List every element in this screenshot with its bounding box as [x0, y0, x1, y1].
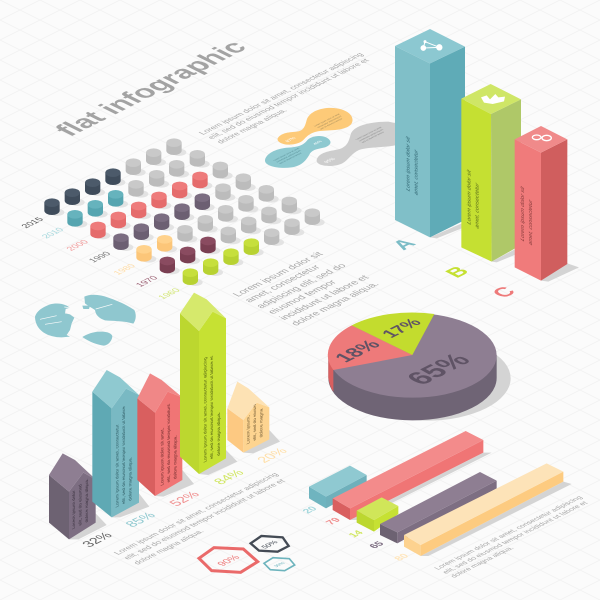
column 20% yellow: Lorem ipsum, — [246, 415, 250, 445]
year labels — [19, 216, 182, 300]
text block: lower right paragraph: dolore magna aliqua. — [448, 545, 516, 579]
bubble: teal: sed do eiusmod tempor — [279, 152, 303, 164]
red side sliver — [328, 355, 333, 392]
bubble: teal — [265, 136, 330, 168]
red wedge — [328, 325, 412, 370]
hexagon 50%: 50% — [259, 539, 280, 550]
panel: speech bubbles — [265, 108, 397, 168]
column 84% green: Lorem ipsum dolor sit amet, consectetur adipiscing — [203, 356, 208, 463]
column B green: Lorem ipsum dolor sit — [467, 169, 472, 226]
bar 79 red — [333, 431, 492, 520]
percent labels: 20% — [253, 446, 291, 465]
pie side — [328, 355, 497, 420]
bar 14 green — [357, 497, 398, 532]
pie top — [328, 313, 497, 398]
percent labels: 52% — [166, 489, 203, 508]
text block: top paragraph: dolore magna aliqua. — [215, 107, 289, 145]
year labels: 1980 — [111, 263, 138, 276]
column 85% teal: elit, sed do eiusmod tempor incididunt ut labore — [121, 405, 126, 505]
year labels: 1990 — [86, 250, 113, 264]
bar value labels: 20 — [301, 505, 321, 515]
column 85% teal: dolore magna aliqua. — [128, 456, 132, 502]
hexagon 90%: 90% — [215, 554, 243, 568]
bar value labels: 80 — [392, 552, 412, 562]
letter C: C — [487, 284, 521, 301]
label 17%: 17% — [377, 316, 426, 340]
text block: middle paragraph: amet, consectetur — [242, 263, 324, 304]
year labels: 2000 — [64, 239, 91, 252]
text block: middle paragraph: Lorem ipsum dolor sit — [231, 251, 326, 298]
text block: middle paragraph: incididunt ut labore et — [277, 274, 372, 322]
icon: share nodes — [421, 41, 442, 50]
column 20% yellow: dolore magna — [259, 407, 263, 439]
letter A: A — [387, 236, 421, 253]
bubble: gray: Lorem ipsum dolor sit amet — [356, 127, 383, 140]
bar 65 purple — [380, 472, 497, 543]
label 65%: 65% — [399, 350, 477, 389]
panel: cylinder grid — [19, 138, 325, 300]
column 52% red: dolore magna aliqua. — [173, 434, 177, 480]
column 85% teal: Lorem ipsum dolor sit amet, consectetur — [115, 423, 119, 508]
text block: top paragraph: Lorem ipsum dolor sit amet, consectetur adipiscing — [197, 51, 366, 136]
text block: lower left paragraph: dolore magna aliqua. — [131, 528, 206, 566]
panel: 3D columns A B C — [387, 29, 579, 301]
year labels: 1960 — [156, 287, 182, 300]
pie shadow — [343, 336, 511, 421]
bubble: teal: 40% — [311, 139, 323, 145]
bubble: gray: 95% — [323, 157, 338, 164]
text block: lower left paragraph: Lorem ipsum dolor sit amet, consectetur adipiscing — [112, 471, 281, 556]
percent labels: 32% — [78, 530, 116, 549]
bar value labels: 79 — [324, 516, 344, 526]
bubble: yellow — [278, 108, 353, 145]
column 20% yellow — [227, 382, 280, 453]
percent labels — [78, 446, 291, 549]
bubble: yellow: Lorem ipsum dolor sit amet — [314, 114, 341, 127]
bubble: gray: consectetur adipiscing elit — [358, 129, 385, 142]
column C red: amet, consectetur — [528, 198, 534, 247]
letter B: B — [441, 264, 474, 281]
bubble: teal: consectetur adipiscing elit — [276, 150, 302, 163]
column 32% purple — [49, 453, 107, 539]
panel: hexagons — [199, 536, 295, 572]
column 32% purple: elit, sed do eiusmod — [78, 483, 82, 527]
row 1980 — [136, 185, 279, 263]
icon: infinity — [532, 135, 551, 141]
text block: middle paragraph: dolore magna aliqua. — [289, 281, 382, 327]
bubble: gray — [317, 122, 397, 166]
column 32% purple: Lorem ipsum dolor — [71, 489, 76, 530]
icon: chess pieces — [481, 94, 505, 104]
text block: lower right paragraph: elit, sed do eiusmod tempor incididunt ut labore et — [440, 500, 590, 575]
column 20% yellow: elit, sed do eiusm — [252, 403, 257, 442]
row 2015 — [44, 138, 186, 216]
column A teal — [395, 29, 465, 238]
hexagon 30%: 30% — [273, 561, 287, 568]
column C red: Lorem ipsum dolor sit — [520, 186, 526, 243]
year labels: 1970 — [133, 275, 160, 288]
column B green — [461, 84, 521, 262]
column 84% green: dolore magna aliqua. — [216, 411, 221, 457]
label 18%: 18% — [330, 337, 386, 365]
bubble: yellow: 87% — [284, 136, 297, 143]
row 1970 — [160, 197, 302, 274]
bar value labels: 65 — [367, 540, 387, 550]
column 52% red — [137, 373, 194, 497]
percent labels: 84% — [210, 468, 247, 486]
bar value labels: 14 — [347, 529, 367, 539]
column 32% purple: dolore magna aliqua. — [85, 478, 89, 524]
panel: pie chart — [328, 312, 511, 421]
column 84% green: elit, sed do eiusmod tempor incididunt ut labore et — [210, 354, 214, 460]
text block: lower right paragraph: Lorem ipsum dolor sit amet, consectetur adipiscing — [432, 495, 585, 571]
row 1990 — [113, 173, 256, 251]
row 2010 — [67, 150, 210, 228]
text block: middle paragraph: adipiscing elit, sed do — [254, 262, 350, 310]
year labels: 2015 — [19, 216, 46, 229]
text block: lower left paragraph: elit, sed do eiusmod tempor incididunt ut labore et — [122, 478, 288, 561]
column 52% red: elit, sed do eiusmod tempor incididunt — [166, 402, 171, 484]
percent labels: 85% — [122, 510, 159, 529]
column C red — [515, 126, 579, 282]
column B green: amet, consectetur — [475, 181, 480, 230]
panel: arrow columns — [49, 293, 291, 549]
title: flat infographic — [48, 37, 254, 140]
bar 80 yellow — [404, 463, 572, 556]
bar value labels — [301, 505, 412, 562]
column 85% teal — [92, 370, 149, 517]
column 84% green — [180, 293, 237, 475]
bubble: teal: Lorem ipsum dolor sit amet — [273, 148, 300, 161]
text block: top paragraph: elit, sed do eiusmod tempor incididunt ut labore et — [206, 57, 372, 140]
panel: horizontal bars — [301, 431, 572, 562]
row 2000 — [90, 162, 233, 239]
icon: world map — [35, 295, 136, 346]
bubble: yellow: sed do eiusmod tempor — [319, 118, 344, 130]
bubble: yellow: consectetur adipiscing elit — [316, 115, 343, 129]
column 52% red: Lorem ipsum dolor sit amet, — [160, 427, 164, 487]
green wedge — [352, 312, 434, 355]
bar 20 teal — [309, 466, 367, 508]
column A teal: Lorem ipsum dolor sit — [406, 136, 411, 193]
bubble: gray: sed do eiusmod tempor — [361, 131, 385, 143]
year labels: 2010 — [39, 226, 66, 240]
row 1960 — [183, 208, 325, 286]
column A teal: amet, consectetur — [414, 148, 419, 197]
text block: middle paragraph: eiusmod tempor — [266, 279, 340, 316]
